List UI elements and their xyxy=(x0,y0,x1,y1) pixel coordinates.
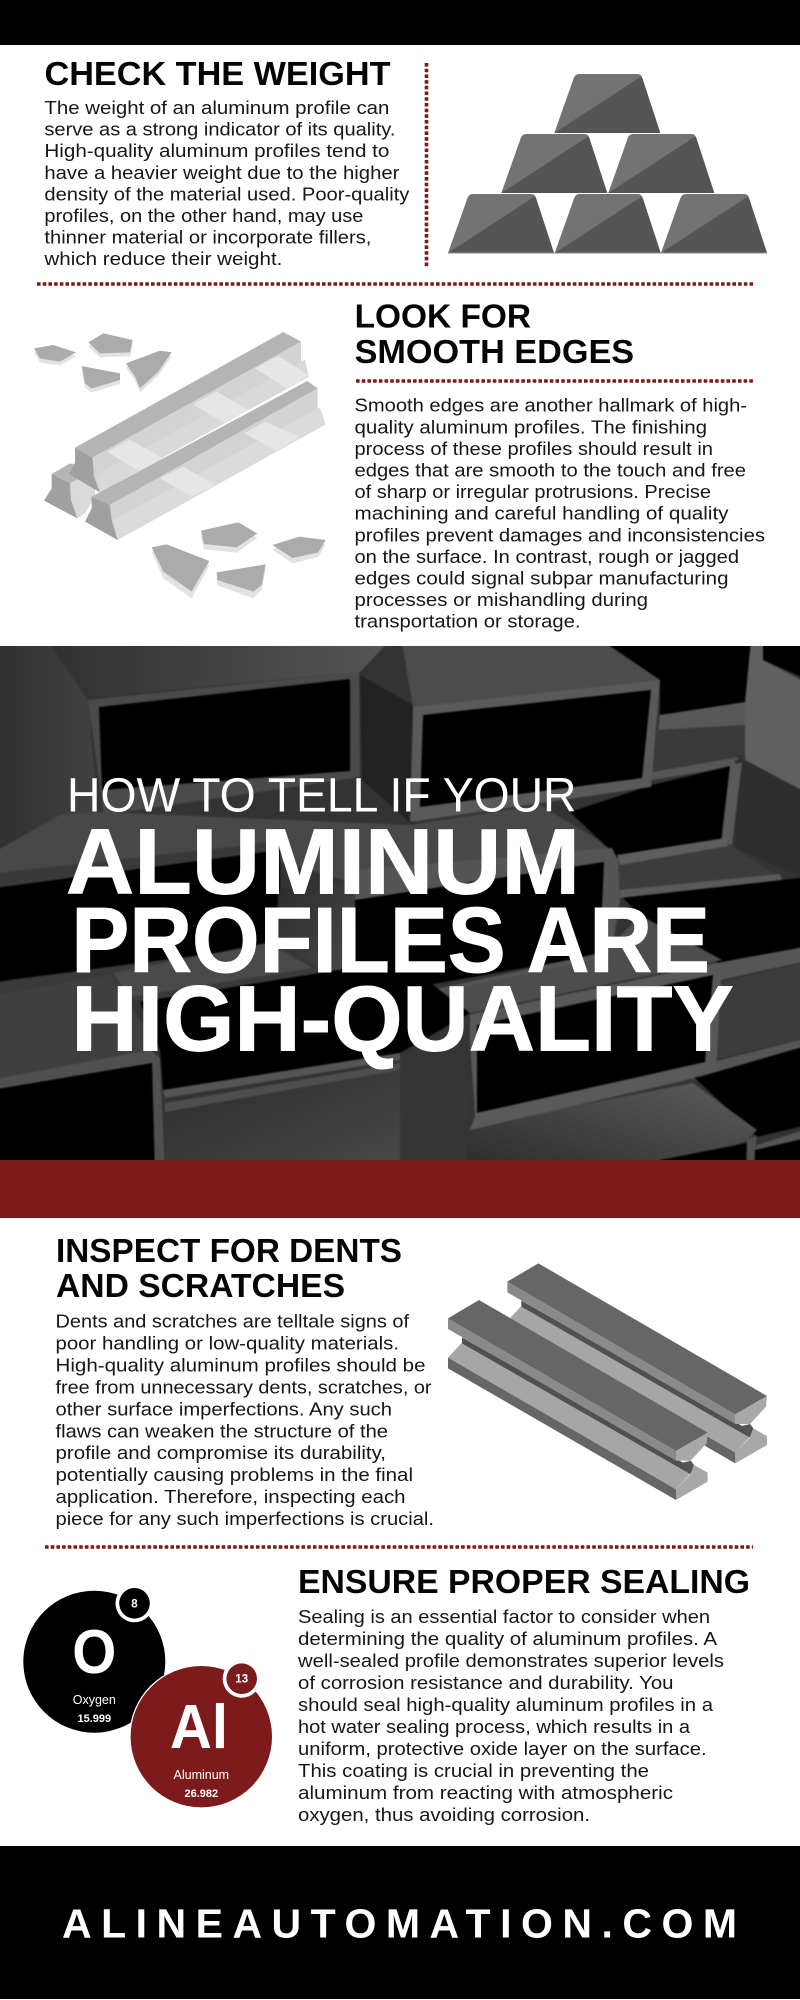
text block: dents explanation: potentially causing problems in the final xyxy=(56,1464,413,1485)
text block: sealing explanation: This coating is crucial in preventing the xyxy=(298,1760,649,1781)
text block: dents explanation: Dents and scratches are telltale signs of xyxy=(56,1310,410,1332)
icon: aluminum element circle: Al xyxy=(170,1693,228,1762)
text block: dents explanation: piece for any such imperfections is crucial. xyxy=(56,1508,434,1529)
title: HOW TO TELL IF YOUR xyxy=(67,770,576,822)
heading: look for smooth edges: LOOK FOR xyxy=(355,298,531,334)
icon: aluminum rails and shards xyxy=(34,332,326,598)
text block: sealing explanation xyxy=(297,1606,724,1825)
text block: smooth edges explanation: transportation or storage. xyxy=(354,611,580,632)
heading: check the weight: CHECK THE WEIGHT xyxy=(44,55,390,92)
text block: smooth edges explanation: processes or mishandling during xyxy=(354,589,648,610)
text block: dents explanation: profile and compromise its durability, xyxy=(56,1442,386,1463)
panel: look for smooth edges xyxy=(34,298,765,632)
text block: smooth edges explanation: process of these profiles should result in xyxy=(354,438,713,459)
text block: sealing explanation: hot water sealing process, which results in a xyxy=(298,1716,691,1737)
text block: sealing explanation: of corrosion resistance and durability. You xyxy=(298,1672,674,1693)
text block: smooth edges explanation: on the surface. In contrast, rough or jagged xyxy=(354,546,739,567)
text block: weight explanation: profiles, on the other hand, may use xyxy=(44,205,363,226)
text block: sealing explanation: Sealing is an essential factor to consider when xyxy=(298,1606,710,1627)
text block: weight explanation: which reduce their weight. xyxy=(43,248,282,269)
heading: ensure proper sealing: ENSURE PROPER SEALING xyxy=(298,1563,750,1600)
text block: sealing explanation: well-sealed profile demonstrates superior levels xyxy=(297,1650,724,1671)
heading: inspect for dents and scratches: INSPECT FOR DENTS xyxy=(56,1232,402,1269)
text block: sealing explanation: uniform, protective oxide layer on the surface. xyxy=(298,1738,707,1759)
icon: two I-beam aluminum profiles xyxy=(448,1263,767,1500)
icon: oxygen element circle xyxy=(23,1584,165,1733)
heading: inspect for dents and scratches: AND SCRATCHES xyxy=(56,1267,345,1304)
text block: dents explanation: other surface imperfections. Any such xyxy=(56,1398,392,1419)
text block: weight explanation: High-quality aluminum profiles tend to xyxy=(44,140,389,161)
panel: check the weight xyxy=(43,55,767,269)
text block: smooth edges explanation: Smooth edges are another hallmark of high- xyxy=(354,395,747,416)
text block: dents explanation: application. Therefore, inspecting each xyxy=(56,1486,406,1507)
text block: dents explanation: flaws can weaken the structure of the xyxy=(56,1420,388,1441)
text block: weight explanation: The weight of an aluminum profile can xyxy=(44,97,389,118)
title: PROFILES ARE xyxy=(71,888,710,992)
icon: oxygen element circle: O xyxy=(72,1618,116,1687)
title xyxy=(66,770,734,1071)
text block: sealing explanation: oxygen, thus avoiding corrosion. xyxy=(298,1804,590,1825)
text block: smooth edges explanation xyxy=(354,395,765,632)
icon: aluminum element circle: 26.982 xyxy=(184,1788,218,1800)
footer website text: ALINEAUTOMATION.COM xyxy=(62,1900,737,1946)
text block: smooth edges explanation: of sharp or irregular protrusions. Precise xyxy=(354,481,711,502)
hero background photo of tubes xyxy=(0,630,800,1176)
text block: sealing explanation: should seal high-quality aluminum profiles in a xyxy=(298,1694,714,1715)
text block: weight explanation: serve as a strong indicator of its quality. xyxy=(44,119,395,140)
text block: smooth edges explanation: edges could signal subpar manufacturing xyxy=(354,568,728,588)
panel: inspect for dents and scratches xyxy=(56,1232,767,1529)
text block: weight explanation xyxy=(43,97,410,269)
text block: sealing explanation: aluminum from reacting with atmospheric xyxy=(298,1782,673,1803)
text block: smooth edges explanation: profiles prevent damages and inconsistencies xyxy=(354,524,765,545)
icon: oxygen element circle: 15.999 xyxy=(77,1713,111,1725)
text block: weight explanation: have a heavier weight due to the higher xyxy=(44,162,399,183)
icon: oxygen element circle: Oxygen xyxy=(73,1693,116,1707)
text block: smooth edges explanation: quality aluminum profiles. The finishing xyxy=(354,416,707,437)
title: ALUMINUM xyxy=(66,810,580,914)
heading: inspect for dents and scratches xyxy=(56,1232,402,1304)
text block: weight explanation: density of the material used. Poor-quality xyxy=(44,183,410,204)
heading: look for smooth edges: SMOOTH EDGES xyxy=(355,333,634,370)
top black bar xyxy=(0,0,800,45)
icon: aluminum element circle xyxy=(129,1660,273,1809)
heading: look for smooth edges xyxy=(355,298,634,370)
text block: smooth edges explanation: edges that are smooth to the touch and free xyxy=(354,460,746,480)
icon: stacked aluminum ingots xyxy=(448,74,767,254)
hero banner: photo of aluminum tubes with title xyxy=(0,630,800,1176)
text block: sealing explanation: determining the quality of aluminum profiles. A xyxy=(298,1628,718,1649)
icon: aluminum element circle: 13 xyxy=(235,1674,248,1686)
title: HIGH-QUALITY xyxy=(71,967,734,1071)
red band xyxy=(0,1160,800,1218)
text block: dents explanation: High-quality aluminum profiles should be xyxy=(56,1354,426,1375)
icon: aluminum element circle: Aluminum xyxy=(174,1768,229,1782)
text block: dents explanation xyxy=(56,1310,434,1529)
footer band with website xyxy=(0,1846,800,1999)
text block: dents explanation: poor handling or low-quality materials. xyxy=(56,1332,399,1354)
icon: oxygen element circle: 8 xyxy=(131,1598,138,1610)
text block: dents explanation: free from unnecessary dents, scratches, or xyxy=(56,1376,432,1397)
panel: ensure proper sealing xyxy=(23,1563,750,1825)
text block: weight explanation: thinner material or incorporate fillers, xyxy=(44,227,371,248)
text block: smooth edges explanation: machining and careful handling of quality xyxy=(354,503,729,524)
